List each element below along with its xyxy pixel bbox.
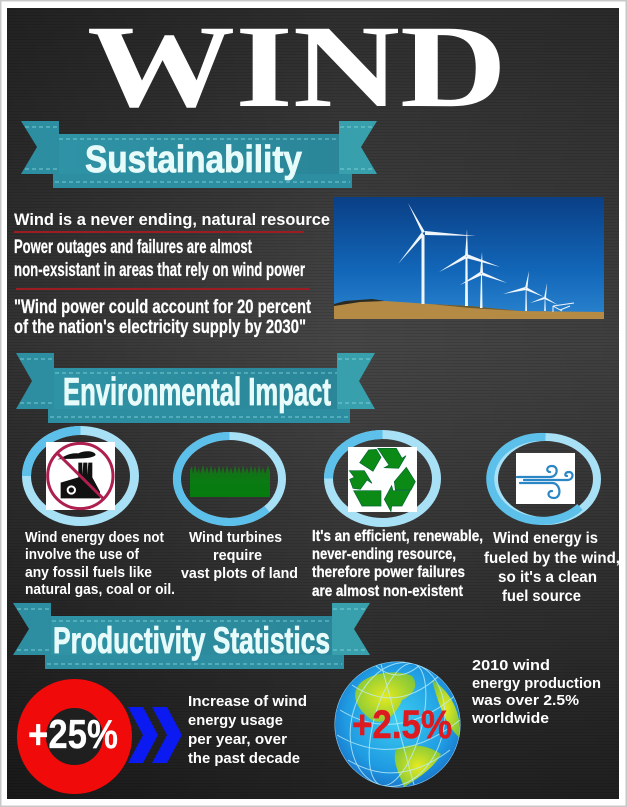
caption: fueled by the wind, xyxy=(484,550,620,567)
description: was over 2.5% xyxy=(471,693,579,709)
caption: therefore power failures xyxy=(312,564,465,581)
chevrons xyxy=(128,707,182,763)
value: +25% xyxy=(28,711,118,757)
caption: vast plots of land xyxy=(181,566,298,582)
description xyxy=(471,658,601,727)
description: energy usage xyxy=(188,712,283,729)
caption: Wind energy does not xyxy=(25,530,164,546)
caption: never-ending resource, xyxy=(312,546,456,563)
caption: are almost non-existent xyxy=(312,583,464,600)
caption: natural gas, coal or oil. xyxy=(25,582,175,598)
caption: fuel source xyxy=(502,588,581,605)
heading: Environmental Impact: Environmental Impact xyxy=(63,371,331,414)
icon: wind swirl xyxy=(516,453,575,504)
icon: crossed-out factory xyxy=(46,442,115,510)
text block: sustainability facts: Power outages and failures are almost xyxy=(14,237,252,258)
ring 2 xyxy=(177,436,282,522)
text block: sustainability facts: of the nation's electricity supply by 2030" xyxy=(14,317,306,338)
description: worldwide xyxy=(471,711,549,727)
item: no fossil fuels xyxy=(25,430,175,598)
heading: Productivity Statistics: Productivity Statistics xyxy=(53,620,330,661)
caption: involve the use of xyxy=(25,547,139,563)
globe xyxy=(334,662,460,788)
ring 1 xyxy=(26,430,134,522)
stat: +2.5% xyxy=(334,659,600,788)
ribbon: Environmental Impact xyxy=(16,353,375,423)
caption: Wind turbines xyxy=(189,530,282,546)
text block: sustainability facts: Wind is a never ending, natural resource xyxy=(14,210,330,229)
description xyxy=(188,693,307,767)
donut xyxy=(32,694,118,780)
caption: any fossil fuels like xyxy=(25,565,152,581)
stat: +25% xyxy=(28,693,307,780)
item: land use xyxy=(177,436,298,582)
description: energy production xyxy=(472,676,601,692)
ribbon: Sustainability xyxy=(21,121,377,188)
ring 4 xyxy=(490,437,597,521)
caption xyxy=(181,530,298,582)
text block: sustainability facts: "Wind power could account for 20 percent xyxy=(14,297,312,318)
ring 3 xyxy=(328,434,436,522)
text block: sustainability facts xyxy=(14,210,330,338)
caption xyxy=(25,530,175,598)
heading: Sustainability: Sustainability xyxy=(85,139,302,181)
value: +2.5% xyxy=(352,703,452,747)
description: 2010 wind xyxy=(472,658,550,674)
caption: so it's a clean xyxy=(498,569,597,586)
title: WIND xyxy=(87,1,507,132)
icon: grass xyxy=(190,465,270,497)
item: renewable resource xyxy=(312,434,483,600)
description: Increase of wind xyxy=(188,693,307,710)
caption: It's an efficient, renewable, xyxy=(312,528,483,545)
text block: sustainability facts: non-exsistant in areas that rely on wind power xyxy=(14,260,305,281)
caption xyxy=(312,528,483,600)
icon: recycle xyxy=(348,447,417,512)
caption xyxy=(484,530,620,605)
description: the past decade xyxy=(188,750,300,767)
caption: require xyxy=(213,548,262,564)
ribbon: Productivity Statistics xyxy=(13,603,370,669)
caption: Wind energy is xyxy=(493,530,598,547)
description: per year, over xyxy=(188,731,287,748)
item: clean fuel xyxy=(484,437,620,605)
photo: wind turbines xyxy=(334,197,604,319)
